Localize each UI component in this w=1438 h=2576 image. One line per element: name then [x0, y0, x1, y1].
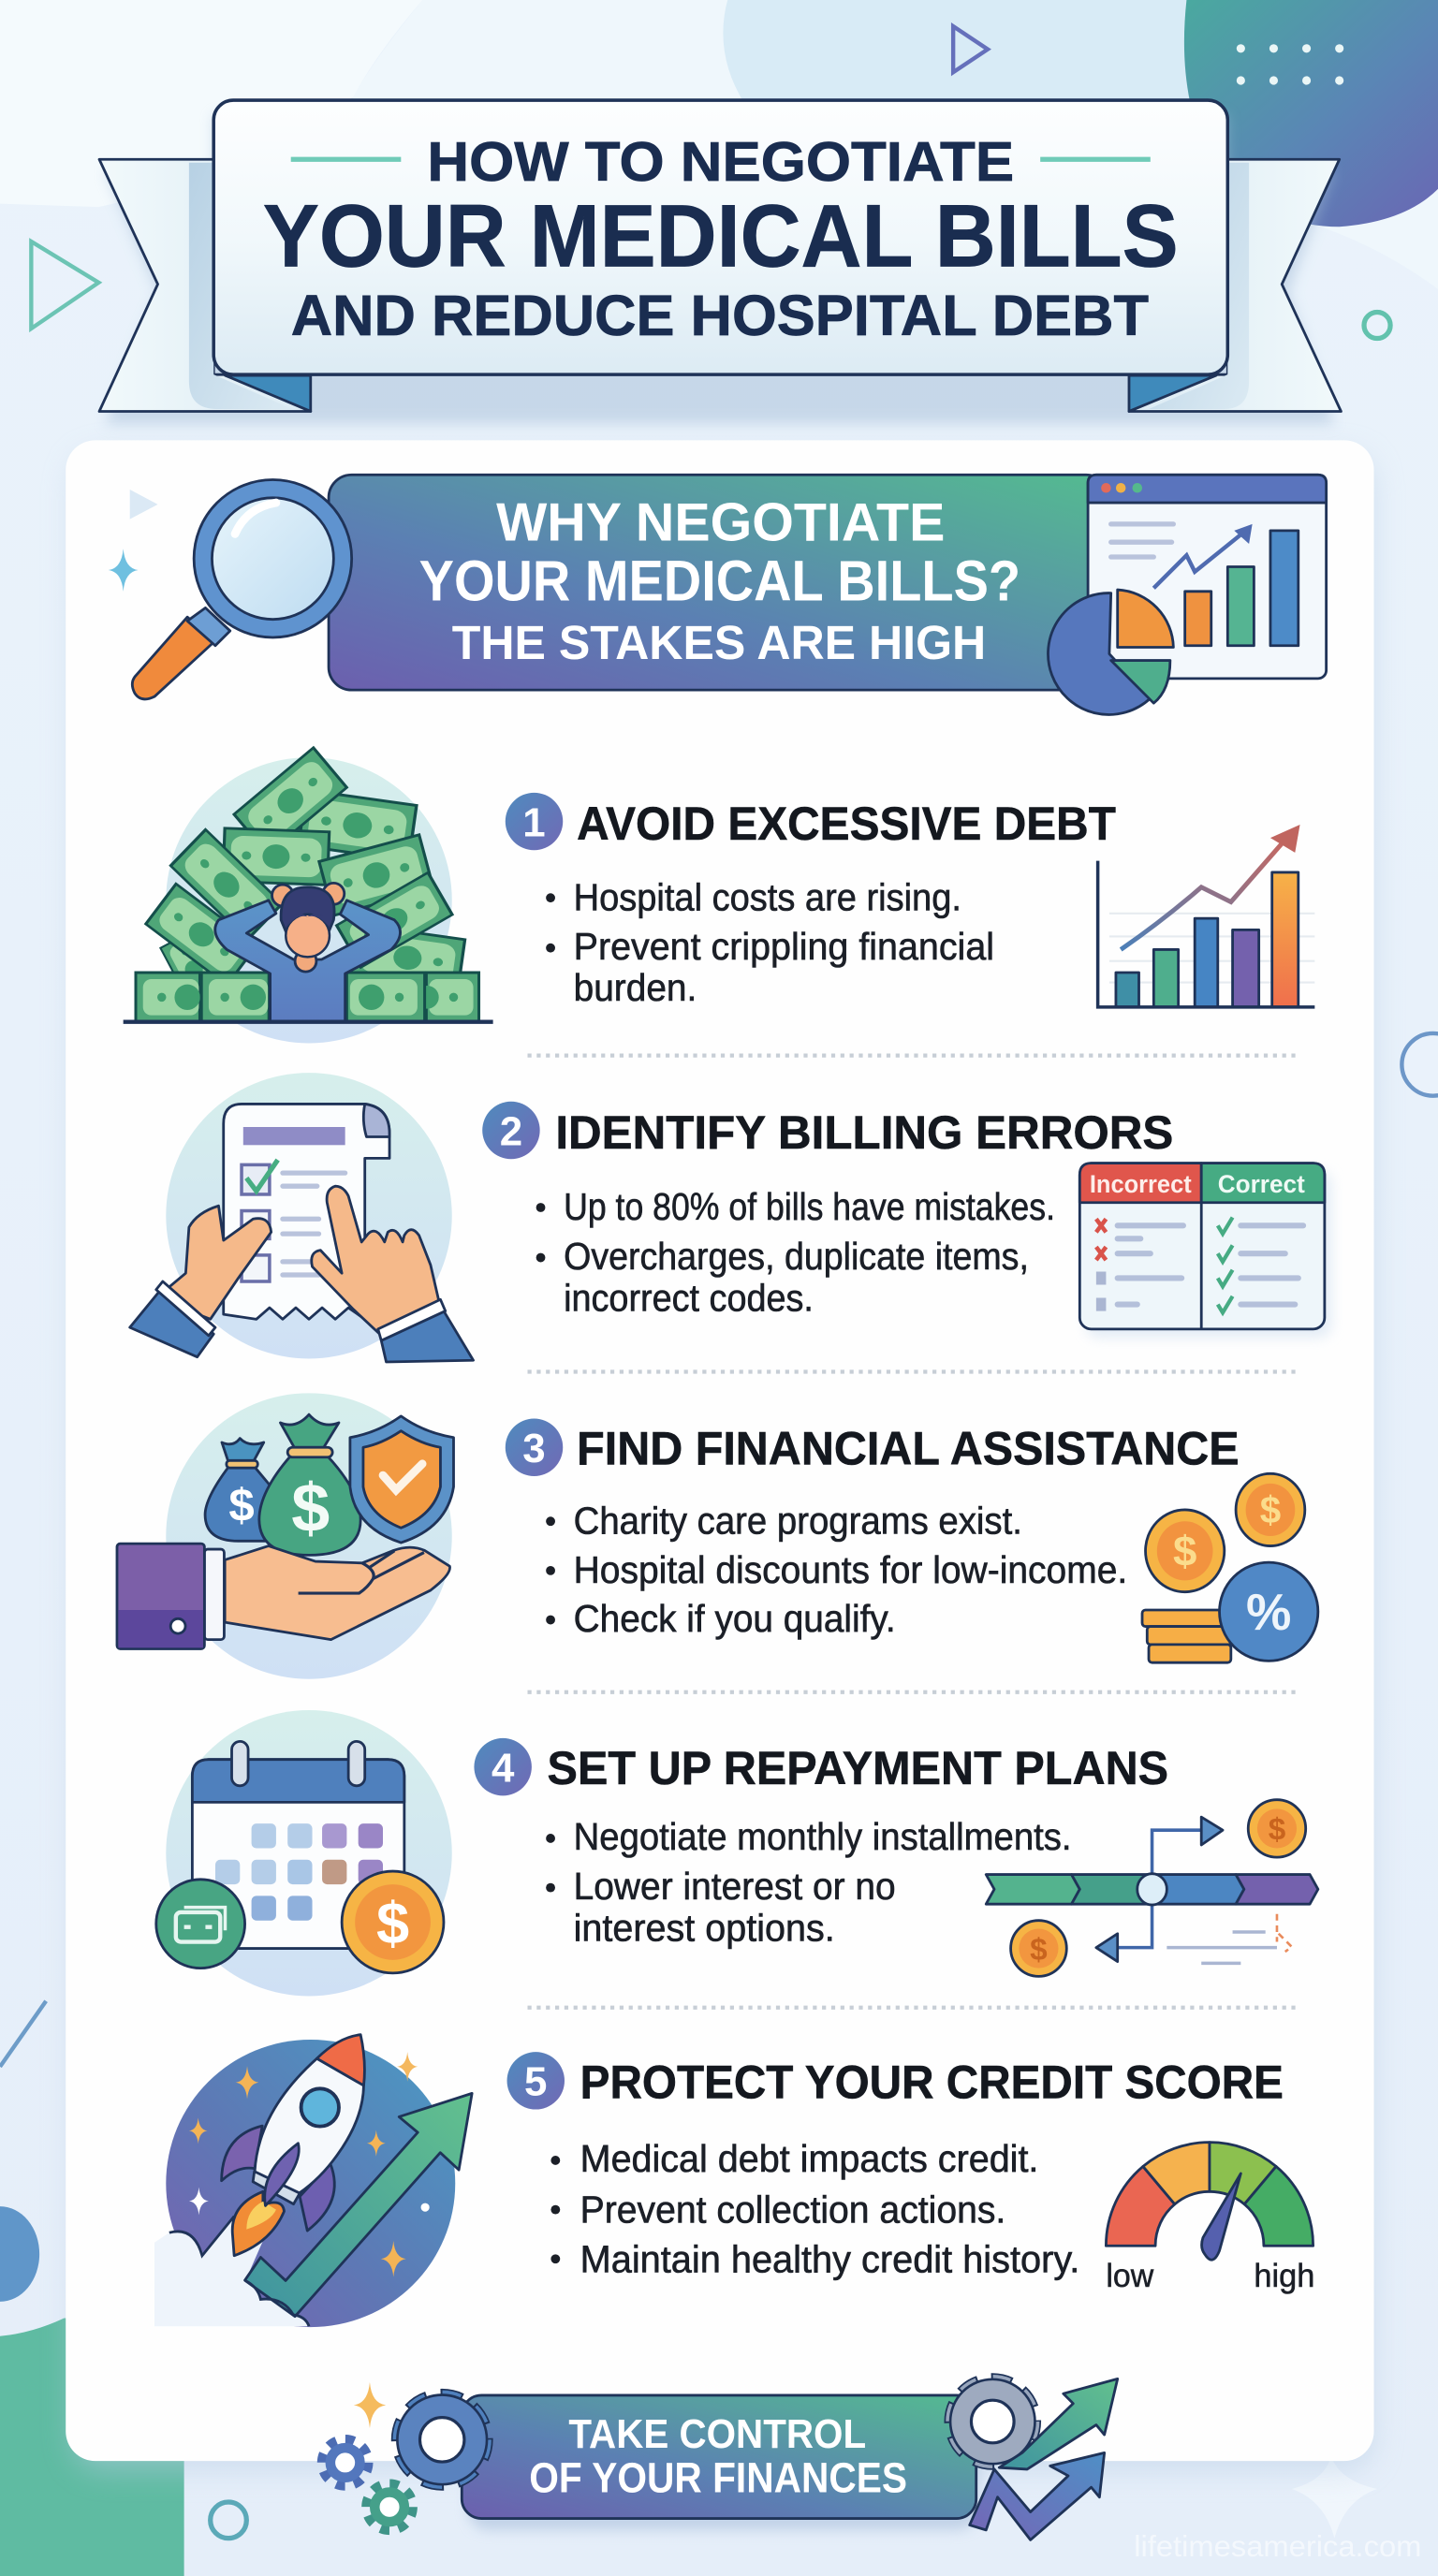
- gauge labels: high: [1254, 2258, 1314, 2294]
- icon: hands holding bill: [130, 1073, 474, 1362]
- icon: rising cost bar chart: [1098, 825, 1314, 1007]
- badge 3: [506, 1419, 563, 1476]
- section 1: avoid excessive debt: [124, 748, 1314, 1043]
- icon: small blue gear: [322, 2439, 368, 2485]
- badge 2: 2: [500, 1108, 522, 1154]
- ribbon shadow: [105, 115, 1334, 424]
- heading banner: YOUR MEDICAL BILLS?: [419, 549, 1020, 613]
- gauge labels: [1106, 2258, 1314, 2294]
- icon: grey gear: [953, 2382, 1032, 2461]
- ribbon right tail: [1129, 159, 1341, 411]
- heading banner: THE STAKES ARE HIGH: [452, 616, 986, 669]
- bullets 3: [546, 1499, 1127, 1640]
- decoration: top right blob with dots: [1184, 0, 1438, 227]
- badge 3: 3: [522, 1426, 546, 1471]
- decoration triangle: [130, 490, 158, 520]
- icon: pie chart: [1048, 590, 1173, 714]
- decoration: top triangle: [953, 26, 988, 72]
- bullets 5: Maintain healthy credit history.: [580, 2237, 1079, 2280]
- icon: repayment timeline: $: [1269, 1813, 1286, 1848]
- badge 5: 5: [524, 2059, 547, 2105]
- main card: [66, 440, 1374, 2461]
- icon: credit score gauge: [1106, 2143, 1314, 2294]
- badge 1: 1: [522, 799, 546, 845]
- decoration: right ring: [1364, 312, 1390, 339]
- bullets 4: Lower interest or no: [574, 1865, 896, 1908]
- bullets 1: burden.: [574, 966, 697, 1009]
- cta line 1: TAKE CONTROL: [568, 2411, 866, 2457]
- decoration: left triangle: [31, 242, 98, 329]
- title line 1: HOW TO NEGOTIATE: [427, 130, 1014, 193]
- title ribbon: [99, 100, 1341, 424]
- icon: green growth arrow: [999, 2378, 1118, 2469]
- title line 3: AND REDUCE HOSPITAL DEBT: [291, 284, 1149, 348]
- icon: incorrect vs correct table: [1079, 1164, 1331, 1338]
- icon: hand holding money bags and shield: [117, 1393, 453, 1679]
- title line 2: YOUR MEDICAL BILLS: [263, 186, 1179, 285]
- panel: why negotiate header: [109, 475, 1327, 714]
- icon: sparkle: [354, 2382, 386, 2428]
- gauge labels: low: [1106, 2258, 1154, 2294]
- ribbon panel: [213, 100, 1227, 374]
- icon: calendar with card and coin: $: [376, 1891, 409, 1956]
- icon: incorrect vs correct table: Correct: [1218, 1169, 1305, 1198]
- bullets 5: Medical debt impacts credit.: [580, 2137, 1038, 2180]
- bullets 3: Charity care programs exist.: [574, 1499, 1022, 1542]
- bullets 2: Up to 80% of bills have mistakes.: [564, 1185, 1055, 1228]
- badge 2: [482, 1102, 540, 1159]
- section 5: protect your credit score: [154, 2035, 1314, 2327]
- bullets 1: Prevent crippling financial: [574, 925, 994, 968]
- heading 5: PROTECT YOUR CREDIT SCORE: [580, 2056, 1284, 2108]
- bullets 1: [546, 875, 994, 1009]
- banner shape: [462, 2395, 976, 2519]
- section 3: find financial assistance: [117, 1393, 1318, 1679]
- icon: hand holding money bags and shield: $: [291, 1469, 330, 1546]
- icon: rocket and rising arrow: [154, 2035, 472, 2327]
- bullets 3: Hospital discounts for low-income.: [574, 1548, 1127, 1591]
- badge 4: [474, 1738, 532, 1795]
- bullets 4: Negotiate monthly installments.: [574, 1815, 1072, 1858]
- icon: browser chart window: [1088, 475, 1327, 679]
- badge 5: [507, 2052, 565, 2110]
- icon: coins and percent: [1142, 1473, 1318, 1662]
- section 2: identify billing errors: [130, 1073, 1331, 1362]
- icon: small green gear: [366, 2484, 413, 2530]
- heading 4: SET UP REPAYMENT PLANS: [548, 1742, 1168, 1794]
- icon: coins and percent: %: [1246, 1584, 1291, 1641]
- bullets 3: Check if you qualify.: [574, 1597, 896, 1640]
- icon: blue gear: [401, 2398, 483, 2481]
- icon: coins and percent: $: [1173, 1528, 1196, 1575]
- bullets 2: incorrect codes.: [564, 1277, 814, 1320]
- cta line 2: OF YOUR FINANCES: [529, 2453, 907, 2501]
- heading 2: IDENTIFY BILLING ERRORS: [555, 1106, 1173, 1159]
- heading banner: WHY NEGOTIATE: [496, 492, 945, 552]
- bullets 5: [550, 2137, 1079, 2280]
- icon: person under money pile: [124, 748, 493, 1043]
- heading 1: AVOID EXCESSIVE DEBT: [577, 798, 1116, 850]
- icon: magnifying glass: [132, 479, 352, 699]
- icon: repayment timeline: $: [1030, 1933, 1048, 1968]
- watermark: lifetimesamerica.com: [1134, 2529, 1421, 2563]
- card shadow: [72, 453, 1374, 2471]
- icon: purple zigzag arrow: [970, 2452, 1105, 2539]
- section 4: set up repayment plans: [156, 1710, 1318, 1996]
- banner shadow: [468, 2408, 977, 2530]
- bullets 2: Overcharges, duplicate items,: [564, 1235, 1029, 1278]
- bullets 4: [546, 1815, 1072, 1950]
- bullets 1: Hospital costs are rising.: [574, 875, 961, 918]
- bullets 5: Prevent collection actions.: [580, 2188, 1005, 2232]
- decoration sparkle: [109, 549, 139, 592]
- icon: calendar with card and coin: [156, 1710, 452, 1996]
- badge 1: [506, 793, 563, 850]
- heading 3: FIND FINANCIAL ASSISTANCE: [577, 1423, 1240, 1475]
- call to action banner: [322, 2378, 1118, 2539]
- icon: hand holding money bags and shield: $: [228, 1481, 255, 1531]
- bullets 4: interest options.: [574, 1907, 835, 1950]
- icon: incorrect vs correct table: Incorrect: [1090, 1169, 1192, 1198]
- bullets 2: [536, 1185, 1055, 1320]
- heading banner: [329, 475, 1109, 690]
- icon: repayment timeline: [986, 1800, 1318, 1976]
- ribbon left tail: [99, 159, 311, 411]
- badge 4: 4: [492, 1745, 515, 1791]
- icon: coins and percent: $: [1260, 1488, 1281, 1531]
